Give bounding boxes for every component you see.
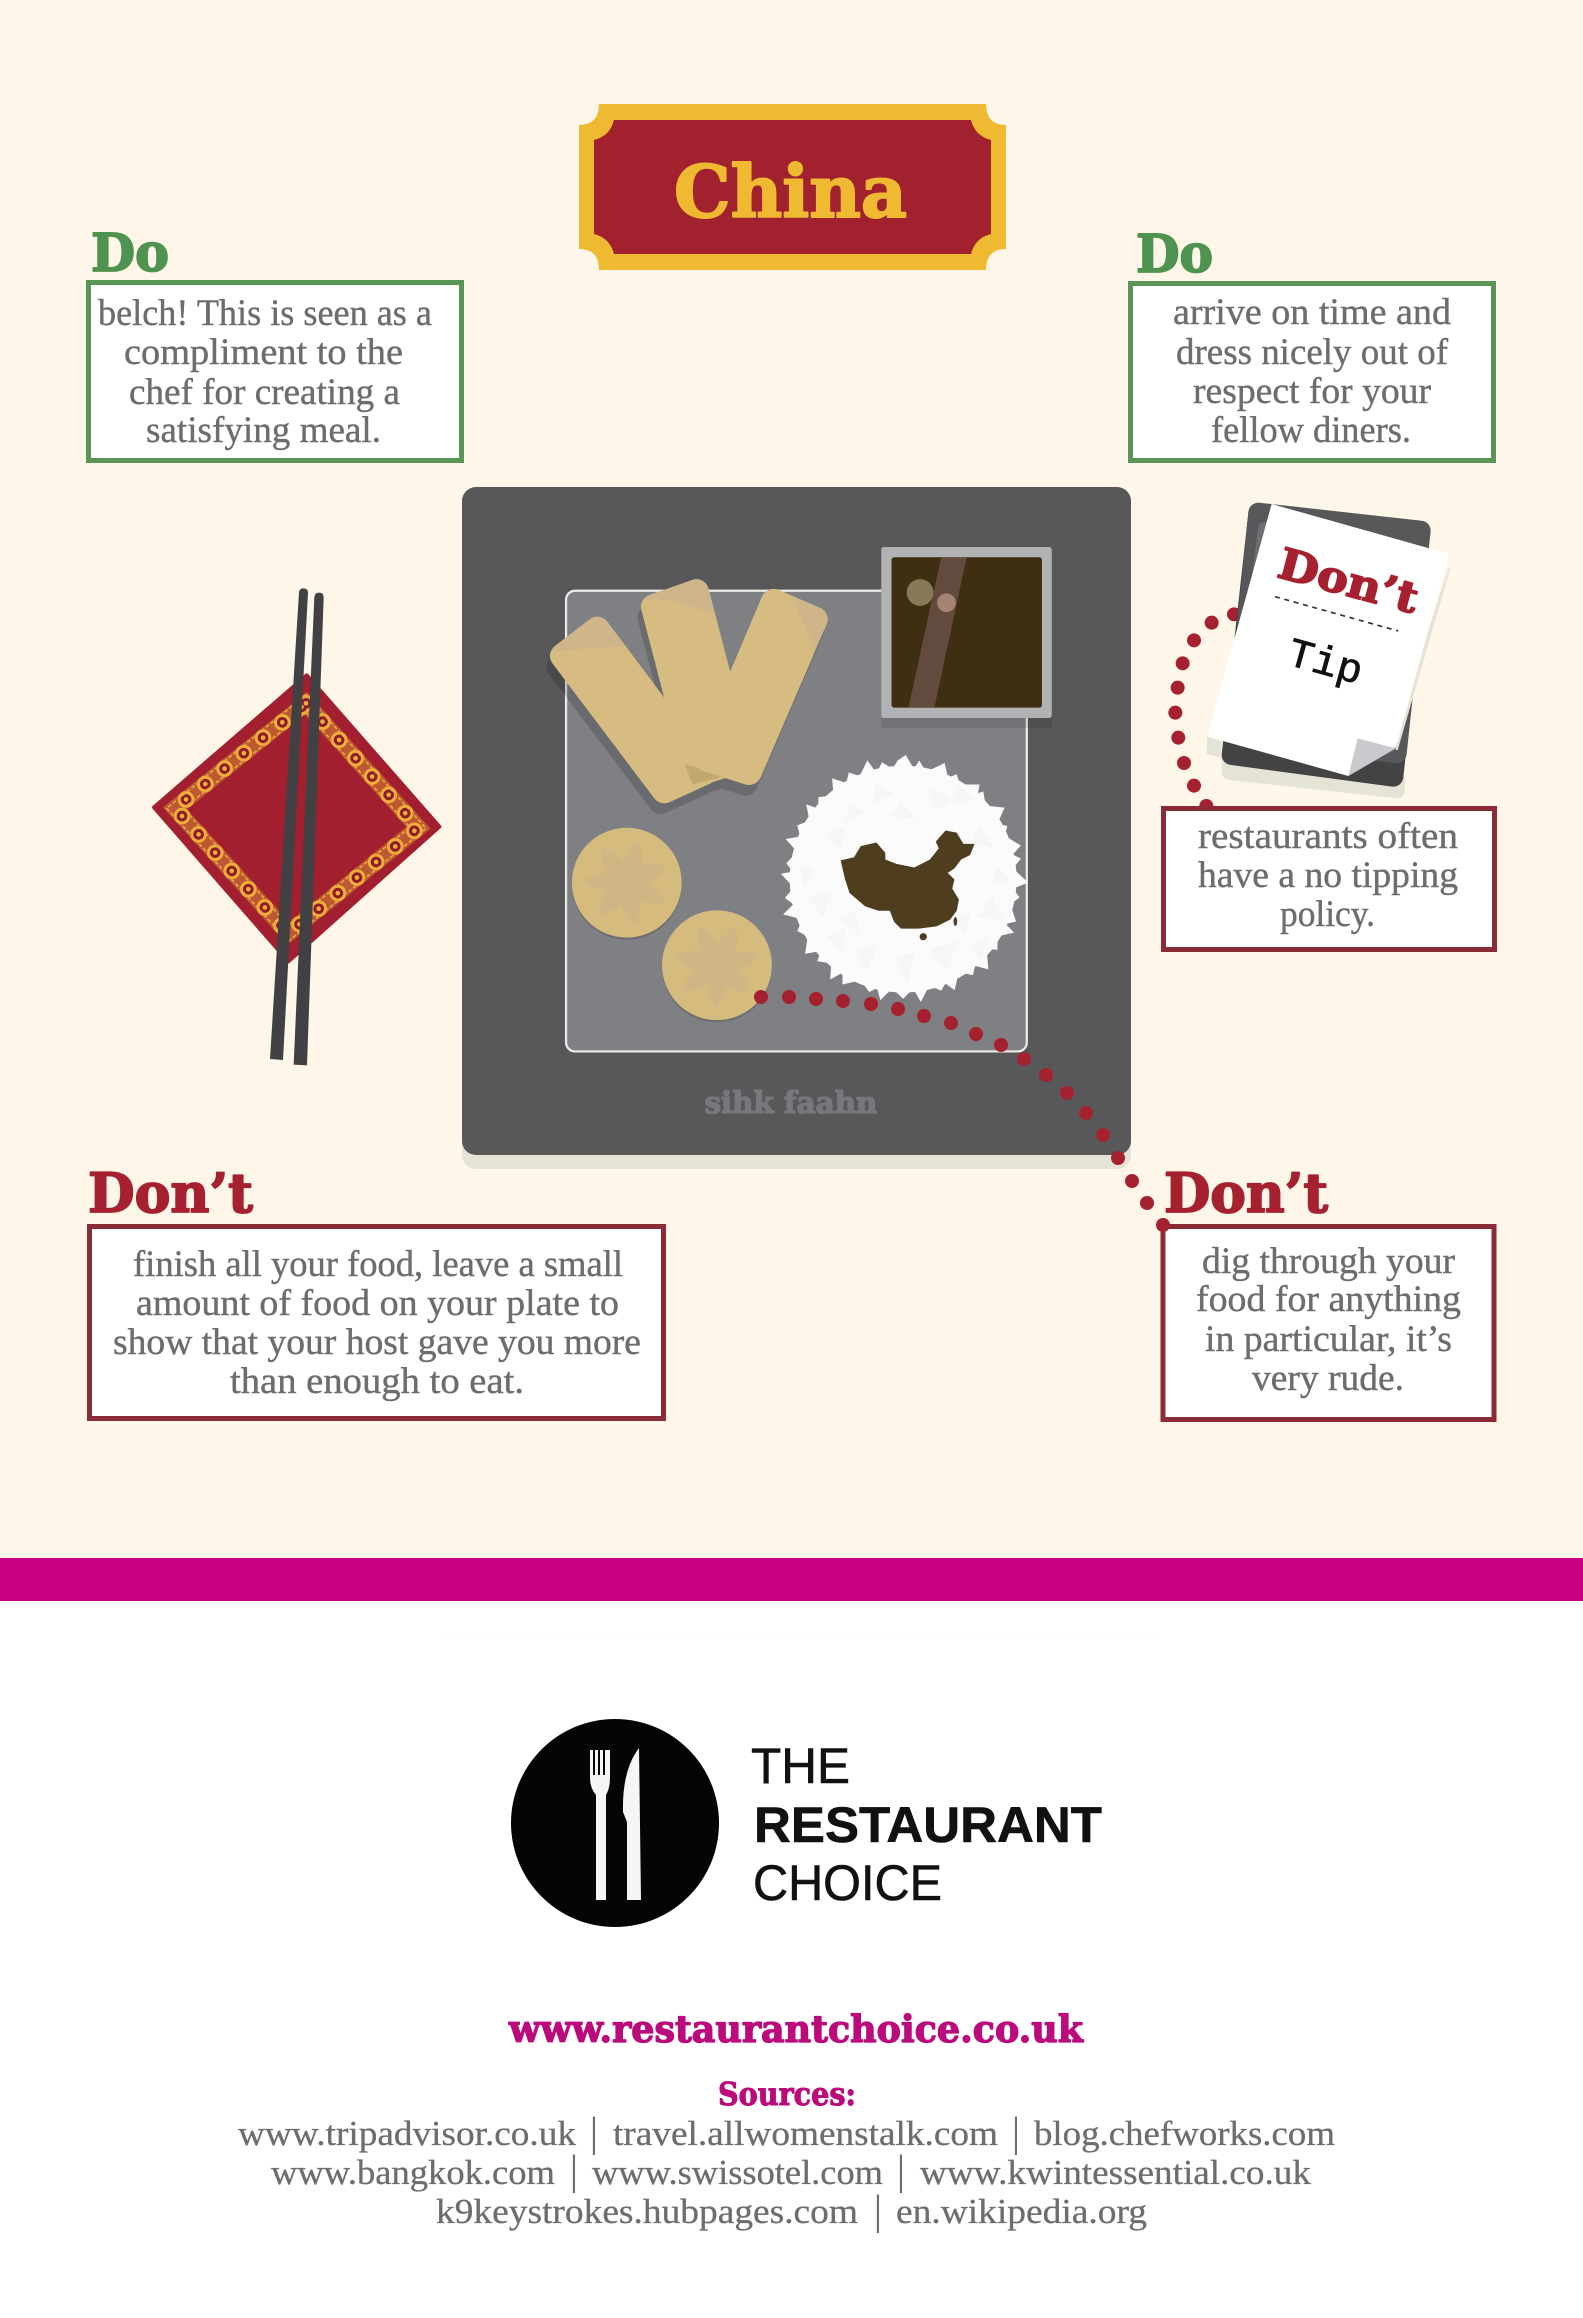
logo: The Restaurant Choice: RESTAURANT <box>754 1797 1102 1853</box>
bill paper <box>1207 504 1449 776</box>
sources: www.bangkok.com <box>271 2153 555 2192</box>
panel: Don't, dig through food: in particular, it’s <box>1205 1319 1452 1360</box>
plate <box>566 591 1027 1051</box>
sources <box>238 2075 1335 2234</box>
panel: Don't, dig through food: very rude. <box>1252 1358 1404 1399</box>
bill paper: Don’t <box>1273 539 1424 624</box>
panel: Don't, dig through food: dig through your <box>1202 1241 1455 1282</box>
sauce dish <box>881 547 1052 728</box>
panel: Don't, dig through food: food for anything <box>1196 1279 1461 1320</box>
panel: Don't, finish all your food: than enough to eat. <box>230 1361 524 1402</box>
sources: www.kwintessential.co.uk <box>920 2153 1312 2192</box>
tray shadow <box>462 500 1131 1169</box>
icon: red napkin with chopsticks <box>154 588 439 1065</box>
panel: Do, arrive on time: Do <box>1136 224 1213 285</box>
sources: | <box>590 2110 598 2156</box>
sources: www.swissotel.com <box>592 2153 883 2192</box>
panel: Do, arrive on time: arrive on time and <box>1173 292 1452 333</box>
dumpling 2 <box>662 910 772 1022</box>
sources: | <box>874 2188 882 2234</box>
panel: Do, belch: Do <box>91 223 169 284</box>
background: cream upper section <box>0 0 1583 1558</box>
sources: www.tripadvisor.co.uk <box>238 2114 577 2153</box>
panel: Do, belch: satisfying meal. <box>146 410 381 451</box>
bill paper: Tip <box>1282 632 1367 697</box>
sources: Sources: <box>718 2075 856 2113</box>
spring rolls <box>559 592 815 801</box>
chopsticks <box>270 588 324 1065</box>
panel: Do, belch: belch! This is seen as a <box>98 293 432 334</box>
panel: Do, arrive on time <box>1130 224 1494 460</box>
background: white lower section <box>0 1601 1583 2318</box>
napkin <box>154 675 439 961</box>
title banner: China <box>579 104 1006 270</box>
panel: Do, belch <box>88 223 462 460</box>
panel: Do, belch: compliment to the <box>124 332 403 373</box>
panel: Do, arrive on time: fellow diners. <box>1211 410 1411 451</box>
title banner: China: China <box>674 149 907 234</box>
logo: The Restaurant Choice <box>511 1719 1102 1927</box>
rice shape of China <box>841 830 975 940</box>
logo circle with fork and knife <box>511 1719 719 1927</box>
sources: travel.allwomenstalk.com <box>613 2114 998 2153</box>
sources: | <box>570 2148 578 2194</box>
tray <box>462 487 1131 1155</box>
panel: Don't, restaurants tipping: restaurants often <box>1198 816 1458 857</box>
dotted path: dumpling to Don't box <box>754 990 1170 1232</box>
rice mound <box>780 755 1028 1003</box>
panel: Don't, dig through food: Don’t <box>1164 1161 1328 1225</box>
website url: www.restaurantchoice.co.uk <box>508 2007 1084 2051</box>
bill tray <box>1230 513 1421 790</box>
sources: en.wikipedia.org <box>896 2192 1147 2231</box>
logo: The Restaurant Choice: CHOICE <box>753 1855 942 1911</box>
panel: Don't, finish all your food: show that your host gave you more <box>113 1322 641 1363</box>
panel: Don't, restaurants tipping: policy. <box>1280 894 1375 935</box>
panel: Don't, dig through food <box>1163 1161 1494 1420</box>
logo: The Restaurant Choice: THE <box>751 1738 850 1794</box>
sources: | <box>897 2148 905 2194</box>
panel: Don't tip bill with tray <box>1168 504 1449 813</box>
panel: Do, belch: chef for creating a <box>129 372 400 413</box>
panel: dinner tray <box>462 487 1131 1169</box>
panel: Do, arrive on time: dress nicely out of <box>1176 332 1449 373</box>
sources: blog.chefworks.com <box>1034 2114 1335 2153</box>
sources: k9keystrokes.hubpages.com <box>436 2192 858 2231</box>
panel: Don't, restaurants tipping <box>1164 808 1494 950</box>
dish name: sihk faahn <box>704 1085 877 1120</box>
dotted path behind bill <box>1168 607 1241 813</box>
magenta divider bar <box>0 1558 1583 1601</box>
panel: Don't, finish all your food: amount of food on your plate to <box>136 1283 619 1324</box>
dumpling 1 <box>572 828 682 940</box>
panel: Don't, restaurants tipping: have a no tipping <box>1198 855 1458 896</box>
sources: | <box>1012 2110 1020 2156</box>
panel: Don't, finish all your food: Don’t <box>88 1161 253 1225</box>
panel: Don't, finish all your food <box>88 1161 664 1418</box>
panel: Do, arrive on time: respect for your <box>1193 371 1431 412</box>
panel: Don't, finish all your food: finish all your food, leave a small <box>133 1244 623 1285</box>
